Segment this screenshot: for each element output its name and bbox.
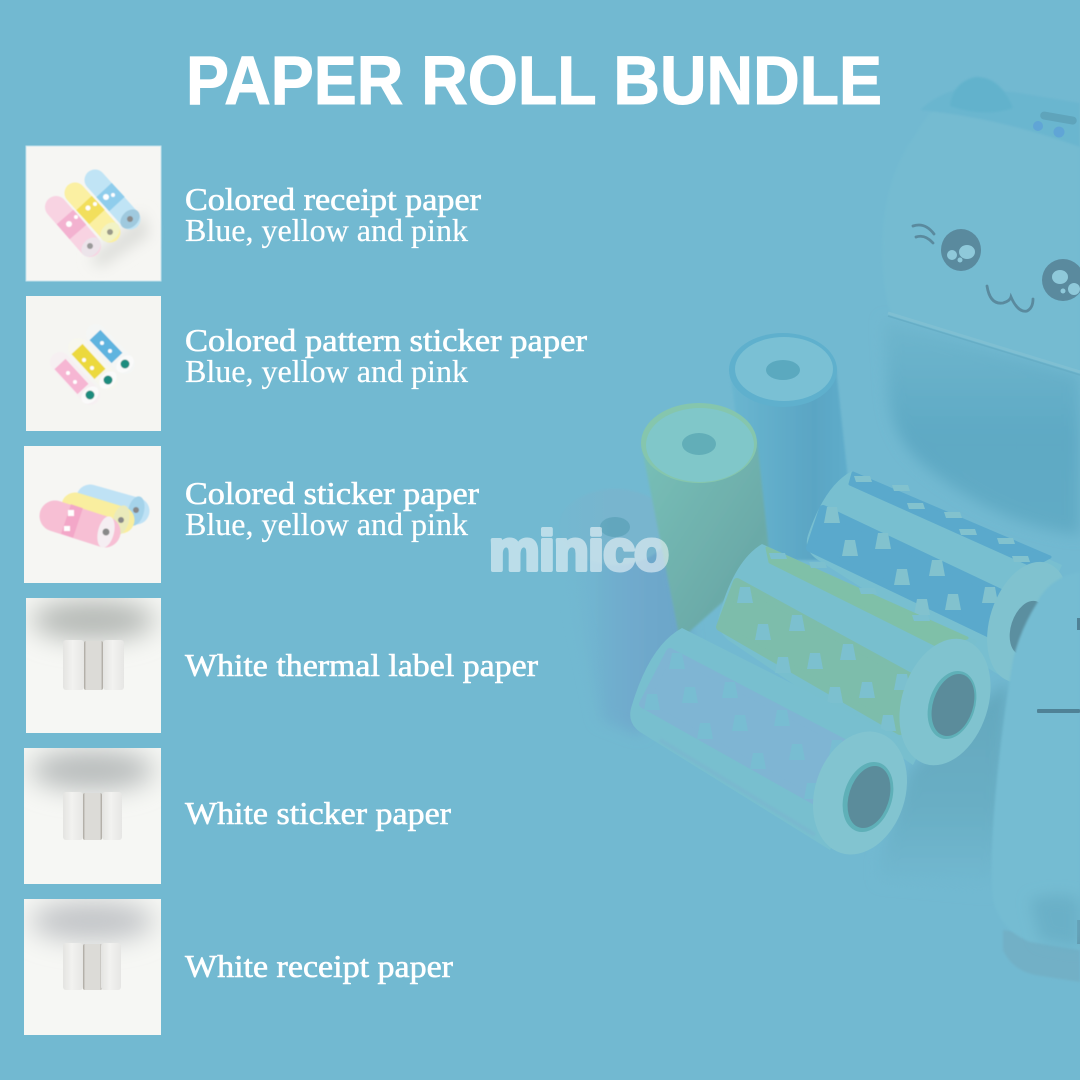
thumbnail: white thermal label paper: [26, 598, 161, 733]
printer face: right eye: [1042, 259, 1080, 301]
roll: blue sticker: [90, 495, 147, 527]
roll: yellow sticker: [75, 504, 132, 536]
printer: back body with cat face: [882, 77, 1080, 535]
roll: pink pattern: [60, 362, 102, 407]
roll: yellow: [75, 193, 123, 245]
label: colored receipt paper: Colored receipt paper: [185, 181, 481, 217]
standing roll: pale: [559, 489, 690, 735]
photo fade into background: [540, 480, 610, 780]
label: colored pattern sticker paper: Blue, yellow and pink: [185, 353, 468, 389]
label: white receipt paper: White receipt paper: [185, 948, 453, 984]
ground shadow between rolls and front printer: [880, 680, 1008, 890]
label: colored receipt paper: Blue, yellow and pink: [185, 212, 468, 248]
roll: yellow pattern: [77, 348, 120, 392]
label: colored receipt paper: [185, 181, 481, 248]
three white rolls: [63, 792, 122, 840]
three white rolls: [63, 640, 124, 690]
standing roll: blue: [729, 333, 850, 560]
lying roll: blue: [807, 471, 1080, 693]
label: colored pattern sticker paper: Colored pattern sticker paper: [185, 322, 587, 358]
printer face: wink and mouth: [913, 225, 1033, 311]
roll: blue pattern: [95, 334, 137, 376]
thumbnail: colored receipt paper: [26, 146, 161, 281]
title: PAPER ROLL BUNDLE: [186, 42, 882, 119]
label: white sticker paper: White sticker paper: [185, 795, 451, 831]
standing roll: green: [641, 403, 770, 640]
watermark logo: minico: [489, 519, 669, 583]
printer face: left eye: [941, 229, 981, 271]
printer: front body: [992, 572, 1080, 982]
label: white thermal label paper: White thermal label paper: [185, 647, 538, 683]
roll: blue: [95, 180, 143, 232]
roll: pink sticker: [55, 510, 118, 549]
label: colored sticker paper: Colored sticker paper: [185, 475, 479, 511]
three white rolls: [63, 943, 121, 990]
background photo: printers and paper rolls: [540, 77, 1080, 982]
label: colored pattern sticker paper: [185, 322, 587, 389]
roll: pink: [56, 207, 104, 260]
lying roll: green: [718, 544, 1006, 777]
label: colored sticker paper: [185, 475, 479, 542]
label: colored sticker paper: Blue, yellow and pink: [185, 506, 468, 542]
lying roll: front lilac: [630, 628, 922, 867]
thumbnail: white receipt paper: [24, 899, 161, 1035]
thumbnail: colored sticker paper: [24, 446, 161, 583]
thumbnail: colored pattern sticker paper: [26, 296, 161, 431]
thumbnail: white sticker paper: [24, 748, 161, 884]
